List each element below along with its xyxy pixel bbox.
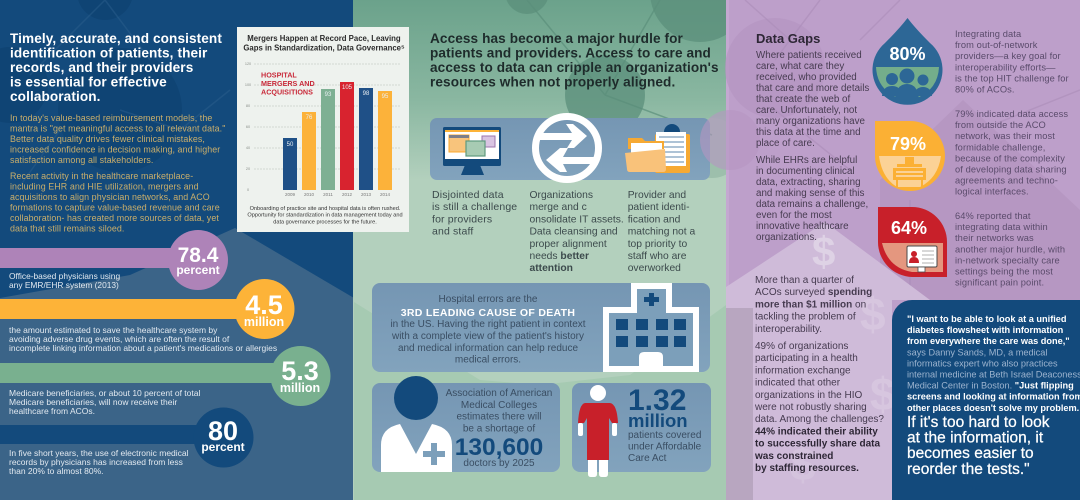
panel: doctor shortage: be a shortage of [463, 423, 535, 434]
text block: aco spending: More than a quarter of [755, 275, 854, 286]
text block: where patients received care: Where patients received [756, 50, 862, 61]
watermark: dollar signs: $ [860, 288, 886, 340]
x axis labels: 2012 [342, 192, 353, 197]
callout: physician quote: other places doesn't solve my problem. [907, 403, 1079, 413]
text block: health information exchange: organizations in the HIO [755, 390, 863, 401]
panel: hospital errors: medical errors. [455, 355, 521, 366]
callout: physician quote: says Danny Sands, MD, a medical [907, 347, 1047, 357]
watermark: dollar signs: $ [870, 368, 896, 420]
x axis labels: 2010 [304, 192, 315, 197]
caption: organizations merge: attention [530, 263, 573, 274]
bars: 93 [325, 92, 332, 98]
chart footnote: Opportunity for standardization in data management today and [247, 213, 403, 219]
chart label: HOSPITAL [261, 70, 297, 80]
text block: health information exchange: were not robustly sharing [754, 402, 867, 413]
x axis labels: 2011 [323, 192, 333, 197]
stat: 5.3 million: Medicare beneficiaries, or about 10 percent of total [9, 388, 200, 398]
heading: timely accurate identification: Timely, accurate, and consistent [10, 31, 222, 46]
panel: doctor shortage: Medical Colleges [461, 400, 537, 411]
stat: 78.4 percent: Office-based physicians using [9, 271, 120, 281]
icon: hospital building [603, 283, 699, 372]
heading: data gaps: Data Gaps [756, 31, 820, 46]
y axis labels: 100 [245, 83, 251, 87]
stat: 80 percent drop [873, 18, 943, 105]
text block: where patients received care: that care and more details [756, 83, 869, 94]
chart title: Mergers Happen at Record Pace, Leaving [247, 34, 401, 43]
bars [283, 82, 392, 190]
text block: 64 percent explanation: in-network specialty care [955, 255, 1060, 265]
chart label: ACQUISITIONS [261, 88, 313, 97]
text block: 64 percent explanation: integrating data within [955, 222, 1048, 232]
text block: aco spending: ACOs surveyed spending [755, 287, 872, 298]
gridlines [254, 64, 400, 169]
stat: 80 percent: percent [201, 440, 245, 454]
stat: 80 percent: In five short years, the use of electronic medical [9, 448, 189, 458]
stat: 4.5 million: million [244, 315, 284, 329]
text block: health information exchange: to successfully share data [755, 439, 880, 450]
stat: 80 percent [0, 408, 254, 476]
caption: organizations merge: Organizations [530, 190, 593, 201]
icon band [430, 118, 710, 180]
panel: patients covered: 1.32 [628, 384, 686, 417]
text block: 64 percent explanation: significant pain point. [955, 278, 1044, 288]
panel: patients covered [572, 383, 711, 477]
text block: 79 percent explanation: logical interfaces. [955, 187, 1029, 197]
text block: where patients received care: many organizations have [756, 116, 865, 127]
stat: 79 percent teardrop [875, 121, 945, 191]
stat: 4.5 million: incomplete linking information about a patient's medications or allergies [9, 343, 277, 353]
caption: patient identification: fication and [628, 214, 681, 225]
caption: organizations merge: proper alignment [530, 239, 607, 250]
caption: disjointed data: for providers [432, 213, 492, 225]
caption: organizations merge: onsolidate IT assets. [530, 214, 624, 225]
text block: value-based reimbursement: In today's value-based reimbursement models, the [10, 113, 212, 123]
stat: 4.5 million: the amount estimated to save the healthcare system by [9, 325, 218, 335]
stat: 5.3 million: million [280, 381, 320, 395]
caption: patient identification: Provider and [628, 190, 686, 201]
text block: 79 percent explanation: from outside the ACO [955, 120, 1046, 130]
heading: access hurdle: access to data can cripple an organization's [430, 60, 719, 75]
y axis labels: 0 [247, 188, 249, 192]
callout: physician quote: Medical Center in Boston. "Just flipping [907, 381, 1074, 391]
panel: hospital errors: in the US. Having the right patient in context [390, 319, 586, 330]
panel: patients covered: million [628, 410, 688, 431]
callout: physician quote [892, 300, 1080, 500]
caption: organizations merge: merge and c [530, 202, 587, 213]
icon: patient in gown [578, 385, 618, 477]
heading: timely accurate identification: is essential for effective [10, 74, 167, 90]
text block: where patients received care: that create the web of [756, 94, 850, 105]
panel: hospital errors: Hospital errors are the [439, 294, 538, 305]
bars: 98 [363, 91, 370, 97]
panel: doctor shortage: 130,600 [455, 434, 543, 461]
callout: physician quote: If it's too hard to look [907, 414, 1050, 431]
text block: health information exchange: information exchange [755, 365, 851, 376]
stat: 5.3 million [0, 346, 330, 416]
icon: doctor [381, 376, 452, 472]
text block: integrating out-of-network data: is the top HIT challenge for [955, 73, 1069, 83]
text block: integrating out-of-network data: Integrating data [955, 29, 1022, 39]
text block: ehrs helpful: data, extracting, sharing [756, 177, 861, 188]
text block: 64 percent explanation: settings being the most [955, 266, 1053, 276]
stat: 5.3 million: Medicare beneficiaries, will now receive their [9, 397, 177, 407]
stat: 80 percent: than 20% to almost 80%. [9, 466, 104, 476]
callout: physician quote: screens and looking at information from [907, 392, 1080, 402]
text block: value-based reimbursement: increased confidence in decision making, and higher [10, 144, 220, 154]
y axis labels: 40 [246, 146, 250, 150]
caption: patient identification: overworked [628, 263, 681, 274]
text block: aco spending: more than $1 million on [755, 299, 866, 310]
text block: aco spending: tackling the problem of [755, 312, 856, 323]
watermark: dollar signs [790, 228, 896, 490]
text block: health information exchange: 49% of organizations [755, 341, 848, 352]
text block: recent marketplace activity: acquisitions to align physician networks, and ACO [10, 192, 210, 202]
text block: 79 percent explanation: formidable challenge, [955, 142, 1045, 152]
panel: patients covered: patients covered [628, 430, 701, 441]
panel: hospital errors: 3RD LEADING CAUSE OF DEATH [401, 307, 575, 319]
stat: 64 percent teardrop: 64% [891, 218, 927, 238]
stat: 4.5 million [0, 279, 294, 353]
caption: patient identification: top priority to [628, 239, 687, 250]
text block: health information exchange: indicated that other [755, 378, 841, 389]
stat: 78.4 percent [0, 230, 228, 290]
text block: recent marketplace activity: Recent activity in the healthcare marketplace- [10, 171, 193, 181]
bars: 95 [382, 94, 389, 100]
caption: disjointed data: Disjointed data [432, 189, 504, 201]
text block: 79 percent explanation: agreements and techno- [955, 176, 1058, 186]
text block: where patients received care: received, who provided [756, 72, 857, 83]
text block: aco spending: interoperability. [755, 324, 822, 335]
caption: organizations merge: needs better [530, 251, 589, 262]
text block: where patients received care: care, what care they [756, 61, 844, 72]
panel: middle green column [353, 0, 750, 500]
y axis labels: 20 [246, 167, 250, 171]
stat: 80 percent: 80 [208, 416, 238, 446]
chart title: Gaps in Standardization, Data Governance⁵ [243, 43, 405, 52]
callout: physician quote: reorder the tests." [907, 461, 1030, 478]
x axis labels: 2009 [285, 192, 296, 197]
caption: disjointed data: and staff [432, 226, 473, 238]
bars: 76 [306, 115, 313, 121]
panel: left navy column [0, 0, 354, 500]
callout: physician quote: internal medicine at Beth Israel Deaconess [907, 370, 1080, 380]
callout: physician quote: from everywhere the care was done," [907, 336, 1070, 346]
text block: health information exchange: by staffing resources. [755, 463, 859, 474]
text block: recent marketplace activity: formations to capture value-based revenue and care [10, 202, 220, 212]
panel: right purple column [700, 0, 1080, 500]
text block: integrating out-of-network data: from out-of-network [955, 40, 1038, 50]
stat: 78.4 percent: percent [176, 263, 220, 277]
y axis labels [245, 62, 251, 192]
text block: ehrs helpful: even for the most [756, 210, 832, 221]
y axis labels: 80 [246, 104, 250, 108]
caption: patient identification: patient identi- [628, 202, 690, 213]
text block: ehrs helpful: organizations. [756, 232, 817, 243]
text block: health information exchange: was constrained [754, 451, 833, 462]
panel: patients covered: under Affordable [628, 442, 702, 453]
stat: 80 percent: records by physicians has increased from less [9, 457, 183, 467]
stat: 78.4 percent: 78.4 [178, 244, 219, 267]
panel: doctor shortage [372, 376, 560, 472]
text block: where patients received care: place of care. [756, 138, 815, 149]
caption: organizations merge: Data cleansing and [530, 227, 618, 238]
x axis labels: 2013 [361, 192, 372, 197]
callout: physician quote: at the information, it [907, 430, 1044, 447]
icon: computer monitor [443, 127, 501, 175]
watermark: dollar signs: $ [812, 228, 835, 275]
panel: hospital errors [372, 283, 710, 372]
bars: 105 [342, 85, 353, 91]
text block: ehrs helpful: in documenting clinical [756, 166, 855, 177]
watermark: dollar signs: $ [790, 438, 816, 490]
callout: physician quote: becomes easier to [907, 445, 1034, 462]
text block: ehrs helpful: While EHRs are helpful [756, 155, 857, 166]
text block: value-based reimbursement: mantra is "get meaningful access to all relevant data." [10, 124, 225, 134]
icon: folder and clipboard [625, 124, 690, 173]
chart footnote: data governance processes for the future. [273, 219, 377, 225]
text block: where patients received care: care. Unfortunately, not [756, 105, 857, 116]
heading: access hurdle: patients and providers. Access to care and [430, 46, 711, 60]
stat: 80 percent drop: 80% [889, 44, 926, 64]
text block: value-based reimbursement: satisfaction among all stakeholders. [10, 155, 153, 165]
text block: 79 percent explanation: 79% indicated data access [955, 109, 1068, 119]
caption: disjointed data: is still a challenge [432, 201, 517, 213]
panel: mergers bar chart card [237, 27, 409, 232]
text block: 64 percent explanation: 64% reported that [955, 211, 1031, 221]
stat: 78.4 percent: any EMR/EHR system (2013) [9, 280, 119, 290]
y axis labels: 120 [245, 62, 251, 66]
callout: physician quote: "I want to be able to look at a unified [907, 314, 1067, 324]
stat: 4.5 million: 4.5 [245, 290, 283, 320]
text block: ehrs helpful: and making sense of this [756, 188, 864, 199]
bars: 50 [287, 142, 294, 148]
caption: patient identification: matching not a [628, 227, 696, 238]
panel: patients covered: Care Act [628, 453, 667, 464]
heading: timely accurate identification: identification of patients, their [10, 46, 208, 60]
text block: health information exchange: participating in a health [755, 353, 858, 364]
text block: 64 percent explanation: their networks was [955, 233, 1034, 243]
stat: 5.3 million: healthcare from ACOs. [9, 406, 95, 416]
caption: patient identification: staff who are [628, 251, 687, 262]
text block: ehrs helpful: data remains a challenge, [756, 199, 868, 210]
chart footnote: Onboarding of practice site and hospital data is often rushed. [250, 206, 401, 212]
stat: 4.5 million: avoiding adverse drug events, which are often the result of [9, 334, 230, 344]
text block: 79 percent explanation: network, was their most [955, 131, 1055, 141]
stat: 79 percent teardrop: 79% [890, 134, 926, 154]
lighter lower area of the left column [0, 228, 354, 500]
stat: 64 percent teardrop [878, 207, 947, 277]
heading: timely accurate identification: collaboration. [10, 89, 101, 104]
panel: doctor shortage: Association of American [446, 388, 552, 399]
text block: ehrs helpful: innovative healthcare [756, 221, 849, 232]
x axis labels [285, 192, 391, 197]
text block: where patients received care: this data at the time and [756, 127, 861, 138]
heading: access hurdle: resources when not properly aligned. [430, 74, 675, 90]
text block: health information exchange: 44% indicated their ability [755, 426, 878, 437]
heading: timely accurate identification: records, and their providers [10, 60, 193, 75]
text block: 64 percent explanation: another major hurdle, with [955, 244, 1065, 254]
icon: data exchange arrows [536, 116, 598, 180]
panel: doctor shortage: doctors by 2025 [463, 458, 535, 469]
chart label: MERGERS AND [261, 79, 315, 88]
x axis labels: 2014 [380, 192, 391, 197]
text block: integrating out-of-network data: interoperability efforts— [955, 62, 1056, 72]
heading: access hurdle: Access has become a major hurdle for [430, 31, 684, 46]
y axis labels: 60 [246, 125, 250, 129]
lighter roof shape behind lower text [726, 222, 930, 500]
panel: hospital errors: and medical information can help reduce [398, 343, 578, 354]
callout: physician quote: diabetes flowsheet with information [907, 325, 1064, 335]
text block: integrating out-of-network data: providers—a key goal for [955, 51, 1061, 61]
text block: 79 percent explanation: of developing data sharing [955, 164, 1067, 174]
text block: health information exchange: data. Among the challenges? [755, 414, 884, 425]
text block: recent marketplace activity: collaboration- has created more sources of data, yet [10, 213, 219, 223]
panel: doctor shortage: estimates there will [456, 412, 542, 423]
text block: 79 percent explanation: because of the complexity [955, 153, 1065, 163]
panel: hospital errors: with a complete view of the patient's history [391, 331, 584, 342]
text block: recent marketplace activity: including EHR and HIE utilization, mergers and [10, 182, 199, 192]
text block: recent marketplace activity: data that still remains siloed. [10, 224, 124, 234]
text block: value-based reimbursement: Better data quality drives fewer clinical mistakes, [10, 134, 205, 144]
text block: integrating out-of-network data: 80% of ACOs. [955, 84, 1015, 94]
stat: 5.3 million: 5.3 [281, 356, 319, 386]
callout: physician quote: informatics expert who also practices [907, 358, 1058, 368]
